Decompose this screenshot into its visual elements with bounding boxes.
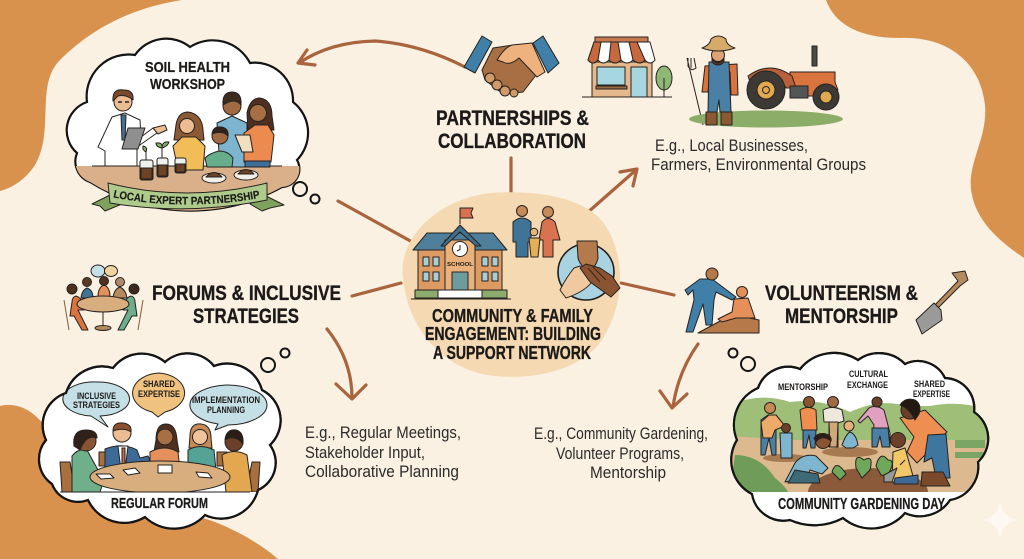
panel: forums and inclusive strategies — [64, 265, 461, 481]
heading: volunteerism: VOLUNTEERISM & — [765, 282, 918, 305]
icon: helping hand — [685, 268, 759, 333]
examples: regular meetings — [305, 424, 461, 481]
arrow: forums to examples — [327, 329, 366, 399]
line: partnerships to center — [509, 158, 513, 192]
workshop title: WORKSHOP — [150, 76, 225, 93]
cloud outline — [67, 39, 308, 211]
label: community gardening day: COMMUNITY GARDENING DAY — [778, 496, 945, 513]
school label: SCHOOL — [447, 262, 474, 268]
center title: COMMUNITY & FAMILY — [432, 306, 593, 326]
heading: partnerships: COLLABORATION — [438, 130, 586, 153]
girl — [173, 112, 205, 170]
background blob: bottom left — [0, 405, 278, 559]
arrow: partnerships to soil workshop — [298, 41, 465, 67]
soil jars and plates — [140, 142, 258, 183]
cloud outline — [731, 353, 988, 528]
garden labels: CULTURAL — [849, 369, 888, 379]
thought circles — [261, 348, 290, 372]
cloud outline — [39, 353, 281, 529]
heading: partnerships — [436, 107, 589, 153]
icon: storefront — [582, 37, 672, 97]
heading: forums: FORUMS & INCLUSIVE — [152, 282, 341, 305]
icon: farmer — [687, 36, 843, 128]
icon: round table group — [64, 265, 143, 330]
line: center to soil workshop — [338, 201, 414, 243]
examples: community gardening: Volunteer Programs, — [556, 445, 684, 463]
arrow: volunteerism to examples — [660, 344, 698, 408]
icon: school — [411, 208, 511, 299]
garden labels — [778, 369, 950, 399]
workshop title — [145, 59, 230, 93]
arrow: center to local businesses — [587, 169, 637, 213]
banner: local expert partnership — [92, 182, 284, 212]
examples: local businesses: Farmers, Environmental Groups — [651, 156, 866, 174]
scientist — [98, 90, 167, 166]
speech bubble: implementation planning: PLANNING — [207, 405, 245, 415]
garden scene — [730, 396, 990, 537]
speech bubble: implementation planning: IMPLEMENTATION — [192, 395, 260, 405]
speech bubble: shared expertise: EXPERTISE — [138, 389, 180, 399]
heading: forums: STRATEGIES — [193, 305, 299, 328]
boy — [205, 127, 233, 167]
forum people and table — [58, 422, 260, 528]
center title — [425, 306, 601, 363]
panel: soil health workshop thought bubble — [66, 38, 320, 212]
garden labels: SHARED — [914, 379, 945, 389]
examples: community gardening: E.g., Community Gardening, — [534, 425, 708, 443]
examples: regular meetings: E.g., Regular Meetings, — [305, 424, 461, 442]
background blob: top left — [0, 0, 182, 191]
panel: community gardening day thought bubble — [728, 348, 990, 537]
icon: joined hands — [558, 241, 620, 300]
thought circles — [293, 182, 320, 204]
connector lines and arrows — [298, 41, 698, 408]
icon: tractor — [747, 46, 839, 110]
speech bubble: shared expertise — [133, 373, 185, 417]
heading: volunteerism: MENTORSHIP — [785, 305, 898, 328]
heading: forums — [152, 282, 341, 328]
center title: ENGAGEMENT: BUILDING — [425, 324, 601, 344]
garden labels: EXCHANGE — [847, 380, 888, 390]
speech bubble: inclusive strategies — [63, 382, 130, 427]
label: regular forum: REGULAR FORUM — [111, 496, 208, 512]
center title: A SUPPORT NETWORK — [433, 343, 591, 363]
examples: local businesses: E.g., Local Businesses, — [655, 137, 808, 155]
examples: regular meetings: Stakeholder Input, — [305, 444, 425, 462]
banner: local expert partnership: LOCAL EXPERT PARTNERSHIP — [114, 190, 259, 205]
garden labels: EXPERTISE — [913, 389, 950, 399]
panel: regular forum thought bubble — [39, 348, 290, 532]
line: center to forums — [352, 283, 401, 296]
panel: partnerships and collaboration — [436, 36, 866, 174]
center blob — [403, 192, 620, 377]
speech bubble: inclusive strategies: STRATEGIES — [73, 400, 120, 410]
background blob: top right — [826, 0, 1024, 258]
workshop table — [76, 166, 300, 211]
heading: partnerships: PARTNERSHIPS & — [436, 107, 589, 130]
mother — [235, 98, 274, 167]
icon: handshake — [464, 36, 559, 97]
thought circles — [728, 348, 755, 371]
examples: regular meetings: Collaborative Planning — [305, 463, 459, 481]
speech bubble: implementation planning — [190, 385, 267, 430]
examples: community gardening — [534, 425, 708, 482]
examples: community gardening: Mentorship — [590, 464, 666, 482]
garden labels: MENTORSHIP — [778, 382, 828, 392]
examples: local businesses — [651, 137, 866, 174]
father — [217, 92, 247, 167]
speech bubble: shared expertise: SHARED — [143, 379, 175, 389]
speech bubble: inclusive strategies: INCLUSIVE — [77, 391, 116, 401]
center panel: community and family engagement — [403, 192, 620, 377]
icon: shovel — [916, 271, 968, 334]
workshop title: SOIL HEALTH — [145, 59, 230, 76]
watermark star — [983, 503, 1017, 537]
icon: family — [513, 206, 560, 257]
line: center to volunteerism — [621, 283, 674, 295]
heading: volunteerism — [765, 282, 918, 328]
panel: volunteerism and mentorship — [534, 268, 968, 482]
